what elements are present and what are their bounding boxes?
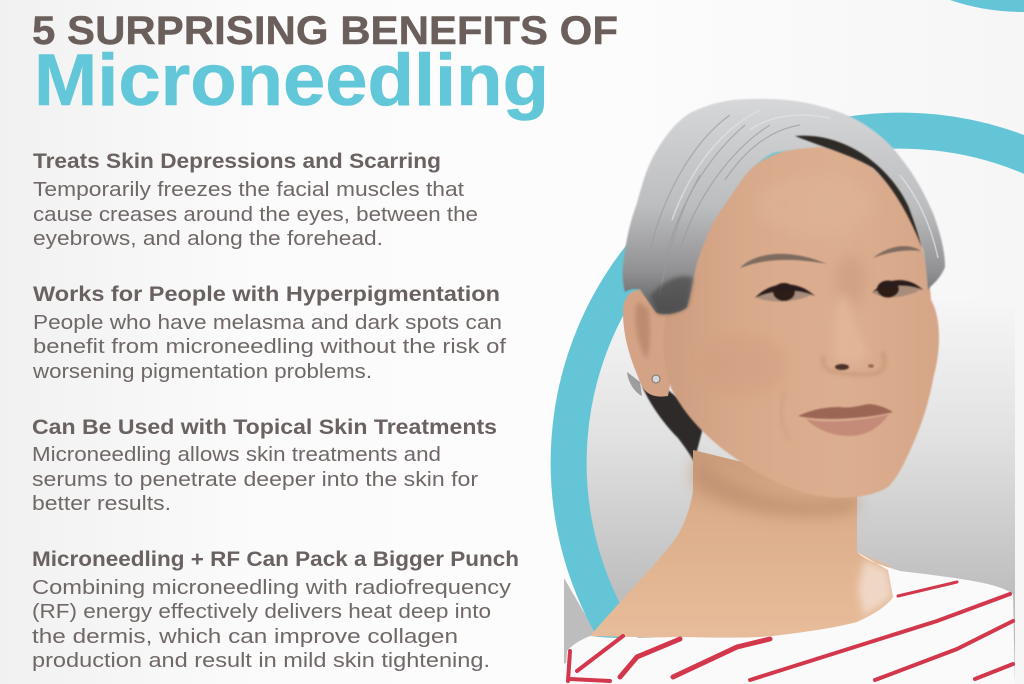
eye socket shading xyxy=(834,254,866,306)
neck shadow under jaw xyxy=(693,455,857,518)
forehead highlight xyxy=(755,175,875,235)
left eye xyxy=(755,283,815,301)
earring xyxy=(652,375,660,383)
benefit 4: Microneedling + RF Can Pack a Bigger Punch xyxy=(32,548,519,571)
lips xyxy=(798,404,893,436)
benefit 4: production and result in mild skin tightening. xyxy=(32,650,490,672)
benefit 3: better results. xyxy=(32,493,171,515)
benefit 3: Can Be Used with Topical Skin Treatments xyxy=(32,416,497,439)
teal ring behind portrait xyxy=(569,131,1024,640)
benefit 2: Works for People with Hyperpigmentation xyxy=(33,283,500,306)
benefit 1: cause creases around the eyes, between the xyxy=(33,204,478,226)
portrait of woman xyxy=(565,99,1015,684)
nose xyxy=(823,352,884,375)
neck and shoulders xyxy=(590,450,895,640)
benefit 3 xyxy=(32,416,497,515)
collar highlight on neck xyxy=(858,560,892,616)
hair wisp below ear xyxy=(627,372,642,396)
nose bridge highlight xyxy=(835,295,868,363)
left eyebrow xyxy=(740,254,827,268)
benefit 2: worsening pigmentation problems. xyxy=(32,361,372,383)
face xyxy=(663,145,939,498)
benefit 4: the dermis, which can improve collagen xyxy=(32,626,458,648)
right eyebrow xyxy=(873,246,921,258)
benefit 4: (RF) energy effectively delivers heat deep into xyxy=(32,601,491,623)
teal corner arc xyxy=(950,0,1024,12)
hair strands xyxy=(650,115,800,295)
benefit 4 xyxy=(32,548,519,672)
benefit 1: eyebrows, and along the forehead. xyxy=(33,228,383,250)
benefit 2 xyxy=(32,283,507,383)
benefit 1: Treats Skin Depressions and Scarring xyxy=(33,150,441,173)
smile line xyxy=(781,392,790,440)
hair shadow near ear xyxy=(650,276,693,314)
right eye xyxy=(872,280,923,298)
dark hair streak xyxy=(795,136,922,248)
benefit 4: Combining microneedling with radiofrequency xyxy=(32,577,511,599)
title: Microneedling xyxy=(34,40,549,121)
benefit 3: serums to penetrate deeper into the skin for xyxy=(32,469,478,491)
cheek blush xyxy=(703,335,787,395)
photo backdrop: grey gradient inside the ring xyxy=(564,300,1015,684)
title: 5 SURPRISING BENEFITS OF xyxy=(32,9,618,53)
title xyxy=(32,9,618,121)
benefit 1: Temporarily freezes the facial muscles that xyxy=(33,179,464,201)
benefit 3: Microneedling allows skin treatments and xyxy=(32,444,441,466)
benefit 2: People who have melasma and dark spots can xyxy=(33,312,502,334)
benefit 1 xyxy=(33,150,478,250)
hair xyxy=(623,99,945,396)
hair behind neck xyxy=(642,386,705,462)
benefit 2: benefit from microneedling without the risk of xyxy=(33,336,507,358)
ear xyxy=(623,290,680,397)
shirt xyxy=(565,552,1015,684)
